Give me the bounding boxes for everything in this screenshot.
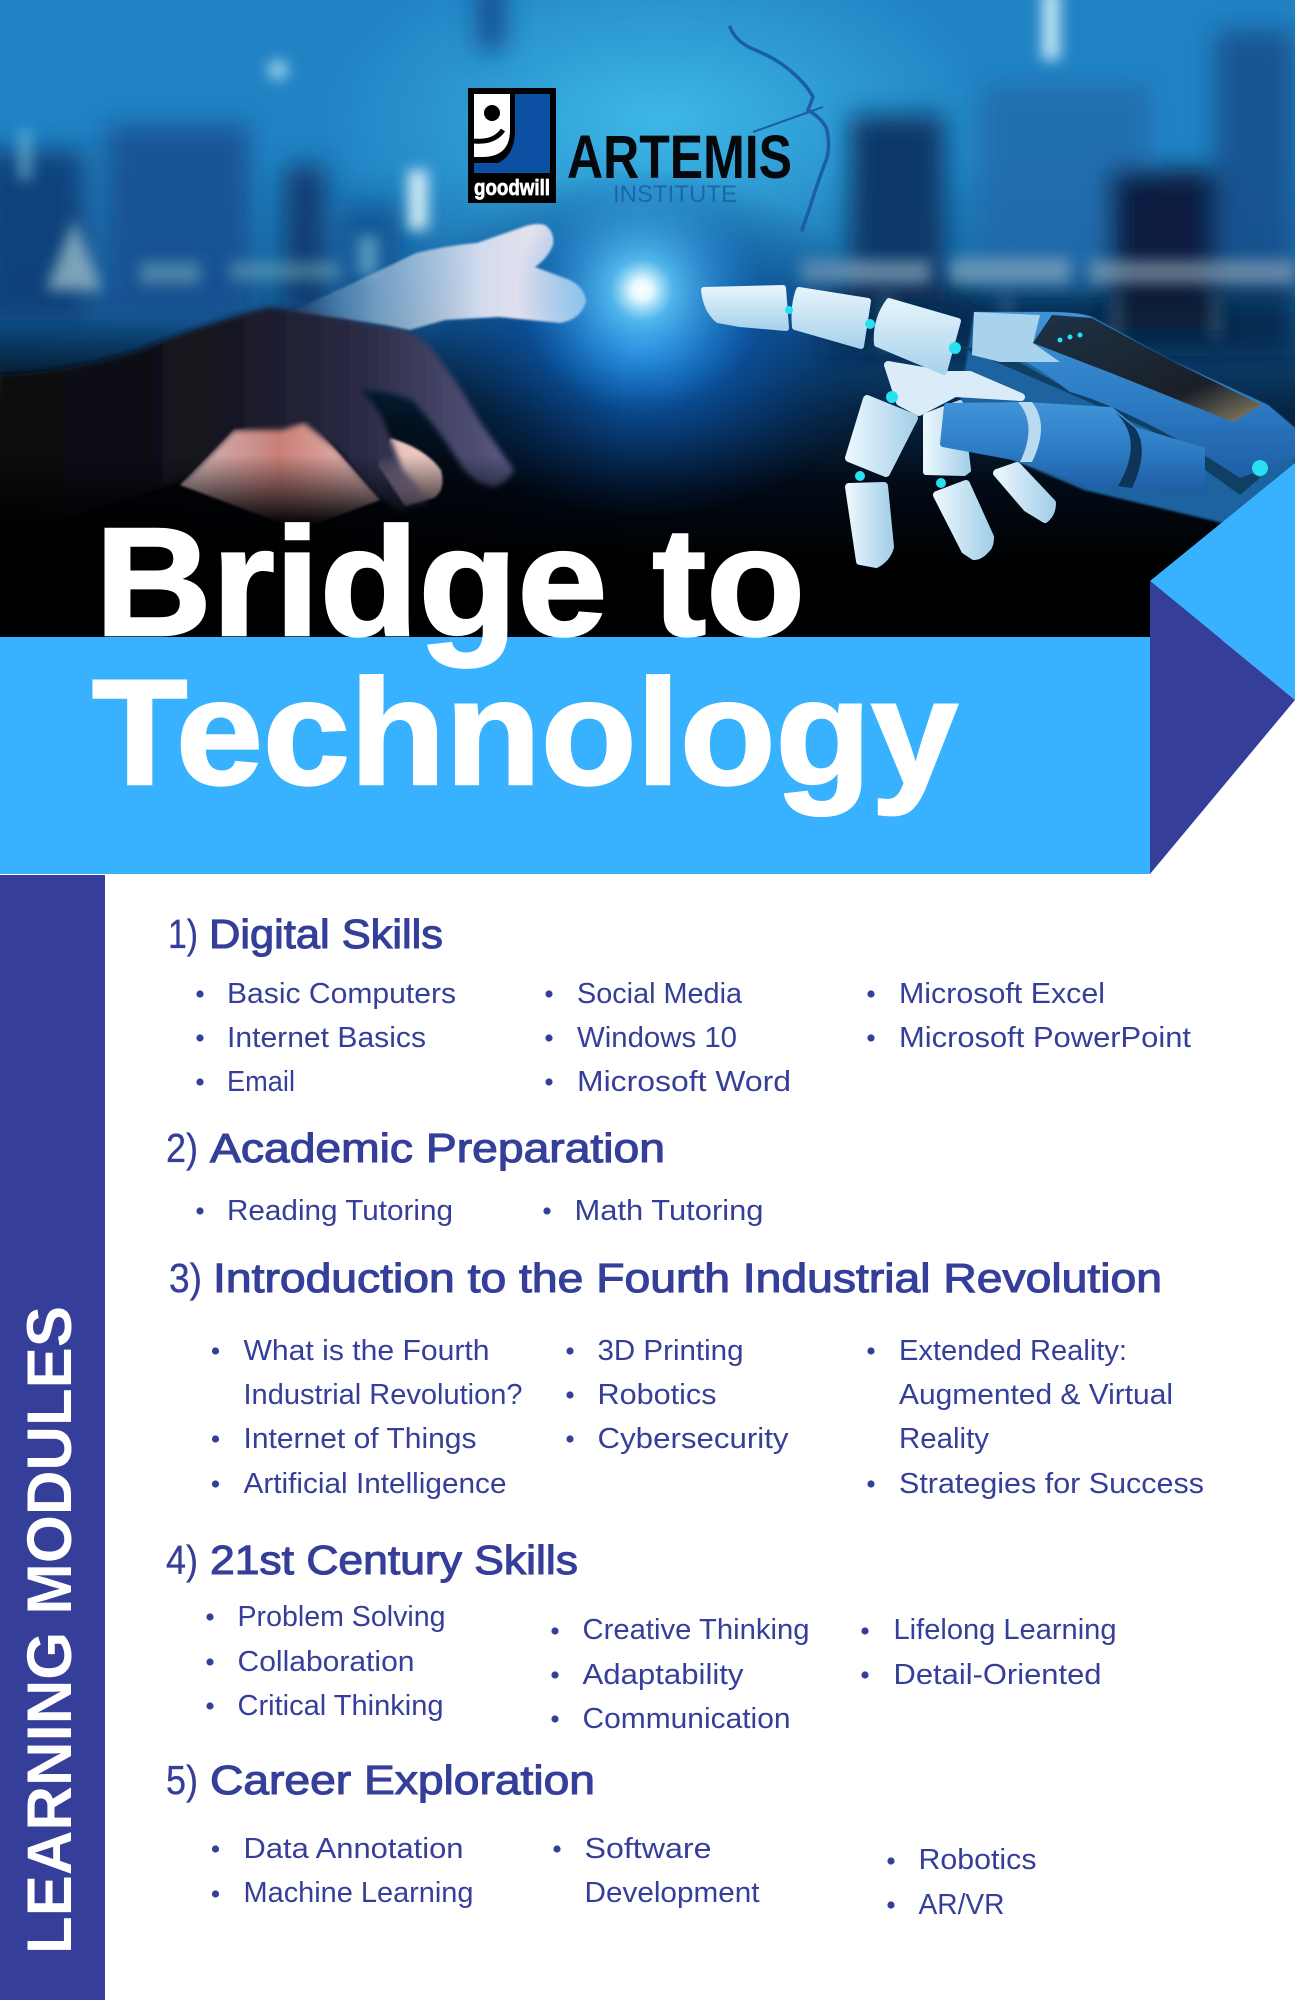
module 1 heading: Digital Skills (209, 911, 443, 957)
module 4 list column 2: Communication (582, 1703, 790, 1735)
Goodwill smile (474, 130, 503, 141)
module 1 list column 1: Internet Basics (227, 1022, 426, 1054)
module 1 list column 3 (867, 978, 1191, 1054)
module 3 list column 1 (212, 1335, 522, 1500)
module 1 list column 1: Basic Computers (227, 978, 456, 1010)
module 5: Career Exploration (166, 1757, 1036, 1921)
robot: index base (877, 301, 958, 372)
module 2 list: Math Tutoring (574, 1195, 764, 1227)
Goodwill eye (484, 105, 500, 121)
robot: second finger upper (849, 399, 914, 473)
arrow: light blue triangle (1150, 463, 1295, 700)
deep blue glow under spark (402, 170, 882, 520)
module 1 list column 3: Microsoft PowerPoint (899, 1022, 1191, 1054)
module 5 list column 1: Machine Learning (244, 1877, 474, 1909)
robot: arm silhouette (960, 312, 1295, 540)
hand: light upper fingers (290, 224, 586, 330)
module 3 list column 3: Extended Reality: (899, 1335, 1127, 1367)
module 3 list column 3: Strategies for Success (899, 1468, 1204, 1500)
module 2: Academic Preparation (166, 1125, 764, 1227)
robot: blue thumb (943, 405, 1202, 490)
module 2 heading: Academic Preparation (210, 1125, 665, 1171)
robot: pale knuckle plate (972, 312, 1060, 362)
module 4 list column 3 (861, 1614, 1116, 1691)
module 5 number: 5) (166, 1757, 198, 1803)
logo: Goodwill (468, 88, 556, 203)
module 3 heading: Introduction to the Fourth Industrial Revolution (213, 1255, 1162, 1301)
module 5 list column 2: Software (584, 1833, 712, 1865)
central sky glow (320, 0, 1000, 300)
blurred city lights (18, 0, 1295, 350)
module 4 list column 2: Adaptability (582, 1659, 744, 1691)
sidebar label: LEARNING MODULES (15, 1306, 85, 1954)
module 4 list column 1: Critical Thinking (238, 1690, 444, 1722)
light spark between fingers (517, 165, 767, 415)
sidebar (0, 875, 105, 2000)
module 1 number: 1) (168, 911, 198, 957)
module 3 list column 1: What is the Fourth (244, 1335, 490, 1367)
arrow: navy triangle (1150, 581, 1295, 874)
robot: cyan joint lights (785, 306, 1268, 488)
module 1 list column 1: Email (227, 1066, 295, 1098)
left darkness behind hand (0, 327, 590, 532)
module 4 heading: 21st Century Skills (210, 1537, 578, 1583)
title line 2: Technology (92, 648, 958, 816)
module 3 list column 1: Industrial Revolution? (244, 1379, 522, 1411)
module 5 list column 1 (212, 1833, 474, 1909)
robot: third fingertip (937, 484, 990, 556)
module 2 list (196, 1195, 763, 1227)
module 1 list column 3: Microsoft Excel (899, 978, 1105, 1010)
Goodwill wordmark: goodwill (474, 175, 550, 200)
module 1 list column 2 (545, 978, 791, 1098)
module 1 list column 2: Windows 10 (577, 1022, 737, 1054)
module 3 list column 3 (867, 1335, 1204, 1500)
module 3: Introduction to the Fourth Industrial Revolution (169, 1255, 1204, 1500)
module 4 list column 1 (206, 1601, 446, 1722)
module 1 list column 2: Microsoft Word (577, 1066, 791, 1098)
robot: index middle (794, 290, 868, 346)
module 2 number: 2) (166, 1125, 198, 1171)
title (92, 496, 958, 816)
hero photo: blurred city skyline with hands (0, 0, 1295, 640)
robot: dark glass panel (1033, 315, 1262, 422)
Artemis arrow (753, 107, 823, 132)
module 5 list column 2 (553, 1833, 760, 1909)
human hand (0, 224, 586, 540)
hand: thumb tip (378, 438, 442, 506)
Goodwill blue panel (474, 94, 550, 173)
title line 1: Bridge to (95, 496, 805, 668)
module 5 list column 3 (887, 1844, 1036, 1921)
Goodwill white g face (474, 94, 510, 157)
blurred dark buildings (0, 0, 1295, 355)
module 4 number: 4) (166, 1537, 198, 1583)
robot: inner joint (955, 345, 1260, 495)
robot: thumb joint (1018, 402, 1041, 462)
module 1 list column 2: Social Media (577, 978, 742, 1010)
module 3 list column 3: Augmented & Virtual (899, 1379, 1173, 1411)
sky gradient (0, 0, 1295, 640)
robot: third finger upper (926, 403, 968, 473)
module 2 list: Reading Tutoring (227, 1195, 453, 1227)
module 5 list column 1: Data Annotation (244, 1833, 464, 1865)
module 4 list column 3: Detail-Oriented (894, 1659, 1102, 1691)
module 3 number: 3) (169, 1255, 202, 1301)
module 5 heading: Career Exploration (210, 1757, 595, 1803)
module 3 list column 2: Cybersecurity (598, 1423, 789, 1455)
robot: fourth finger (997, 466, 1052, 519)
robot: second fingertip (849, 486, 890, 564)
module 5 list column 3: Robotics (918, 1844, 1036, 1876)
Artemis bow (730, 27, 829, 230)
module 4 list column 1: Problem Solving (238, 1601, 446, 1633)
module 1 list column 1 (196, 978, 456, 1098)
robot: pale palm (888, 365, 1021, 412)
module 3 list column 2: Robotics (598, 1379, 716, 1411)
module 3 list column 3: Reality (899, 1423, 990, 1455)
module 4 list column 2: Creative Thinking (582, 1614, 810, 1646)
module 3 list column 2 (566, 1335, 789, 1455)
hand: pink palm and thumb (180, 420, 442, 530)
robot: back-of-hand plate (972, 312, 1295, 478)
Institute wordmark: INSTITUTE (613, 181, 737, 208)
module 3 list column 1: Artificial Intelligence (244, 1468, 506, 1500)
module 1: Digital Skills (168, 911, 1191, 1098)
Goodwill black square (468, 88, 556, 203)
Artemis wordmark: ARTEMIS (567, 123, 792, 191)
logo: Artemis Institute (567, 27, 829, 230)
module 5 list column 3: AR/VR (918, 1889, 1004, 1921)
module 4 list column 2 (551, 1614, 810, 1735)
banner: light blue band (0, 637, 1150, 874)
module 5 list column 2: Development (584, 1877, 760, 1909)
robot hand (704, 288, 1295, 564)
module 3 list column 1: Internet of Things (244, 1423, 476, 1455)
module 4: 21st Century Skills (166, 1537, 1116, 1735)
module 3 list column 2: 3D Printing (598, 1335, 744, 1367)
module 4 list column 1: Collaboration (238, 1646, 414, 1678)
hand: dark fingers (0, 303, 516, 511)
robot: thumb rear joint (1115, 412, 1142, 488)
robot: index fingertip (704, 288, 786, 328)
module 4 list column 3: Lifelong Learning (894, 1614, 1116, 1646)
